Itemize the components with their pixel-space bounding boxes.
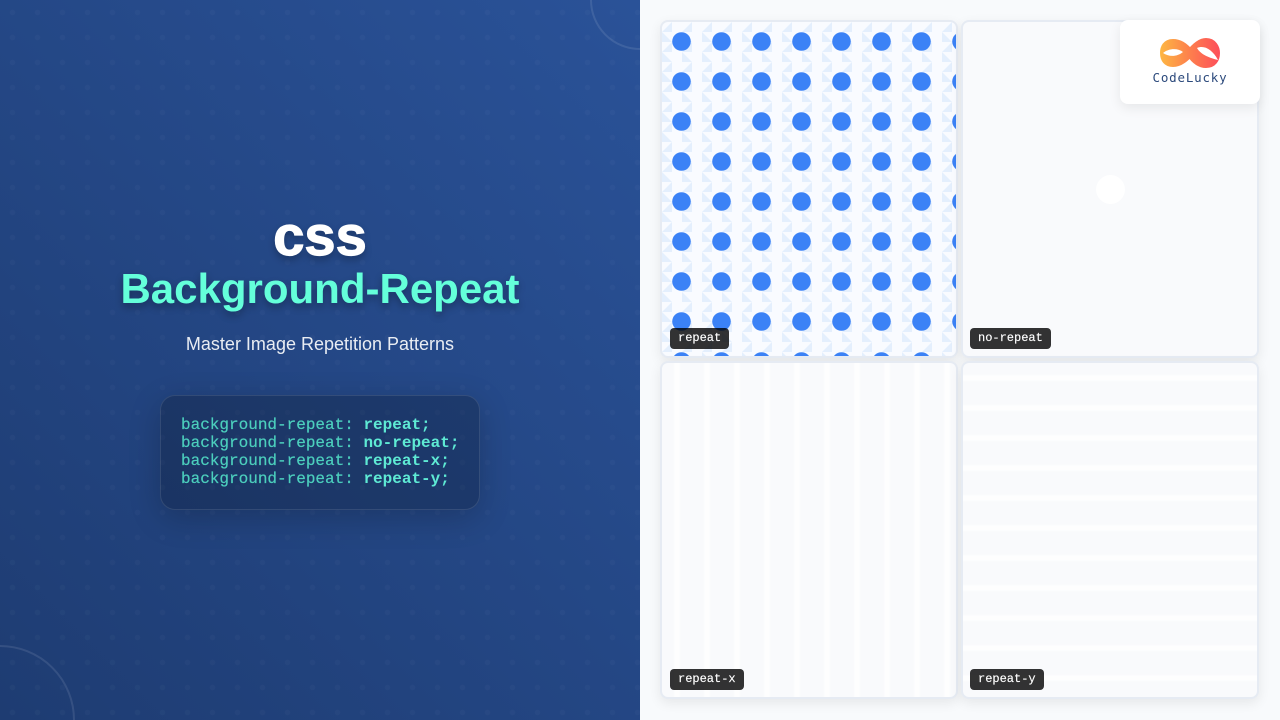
label: repeat [670, 328, 729, 349]
code block [160, 395, 480, 510]
subtitle: Master Image Repetition Patterns [186, 334, 454, 354]
demo cell: repeat-y [961, 361, 1259, 699]
logo card [1120, 20, 1260, 104]
label: no-repeat [970, 328, 1051, 349]
panel: left title side [0, 0, 640, 720]
title: Background-Repeat: Background-Repeat [120, 265, 520, 312]
single white circle [1096, 174, 1124, 204]
decorative ring: bottom left [0, 646, 74, 720]
decorative ring: top right [591, 0, 640, 49]
label: repeat-x: repeat-x [678, 672, 736, 686]
demo cell: no-repeat [961, 20, 1259, 358]
label: no-repeat: no-repeat [978, 331, 1043, 345]
code block: background-repeat: repeat; background-repeat: no-repeat; background-repeat: repeat-x; background-repeat: repeat-y; [181, 416, 459, 488]
label: repeat-y [970, 669, 1044, 690]
title: css: css [273, 204, 367, 267]
demo cell: repeat [660, 20, 958, 358]
label: repeat-y: repeat-y [978, 672, 1036, 686]
label: repeat-x [670, 669, 744, 690]
logo wordmark: CodeLucky [1153, 70, 1227, 85]
demo cell: repeat-x [660, 361, 958, 699]
icon: infinity logo [1160, 38, 1220, 68]
label: repeat: repeat [678, 331, 721, 345]
